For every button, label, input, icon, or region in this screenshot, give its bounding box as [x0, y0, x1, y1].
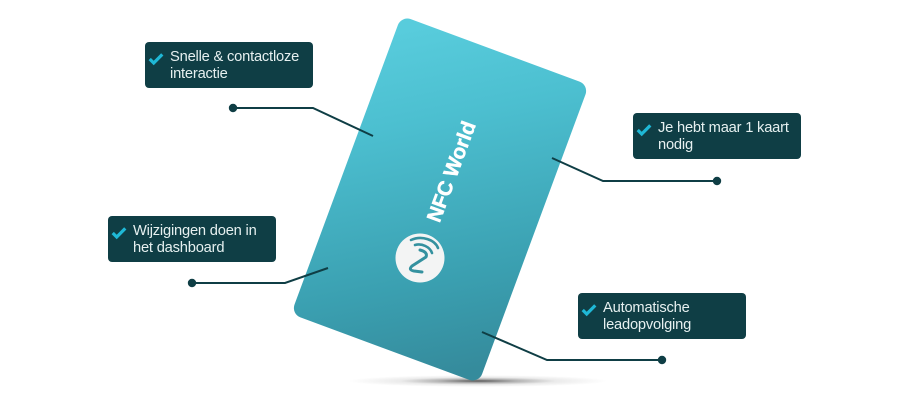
callout: lead tracking: Automatische — [603, 300, 690, 316]
callout: contactless — [145, 42, 313, 88]
logo badge — [396, 234, 444, 282]
callout: lead tracking: leadopvolging — [603, 316, 691, 332]
card title: NFC World — [423, 118, 481, 225]
callout: one card: Je hebt maar 1 kaart — [658, 120, 789, 136]
connector: lead tracking — [482, 332, 666, 364]
callout: one card — [633, 113, 801, 159]
NFC card — [291, 16, 589, 383]
callout: lead tracking — [578, 293, 746, 339]
connector: contactless — [229, 104, 373, 136]
callout: one card: nodig — [658, 136, 693, 152]
callout: contactless: Snelle & contactloze — [170, 49, 299, 65]
callout: dashboard: Wijzigingen doen in — [133, 223, 257, 239]
callout: dashboard: het dashboard — [133, 240, 224, 256]
card shadow — [348, 375, 608, 387]
connector: one card — [552, 158, 721, 185]
callout: dashboard — [108, 216, 276, 262]
connector: dashboard — [188, 268, 328, 287]
callout: contactless: interactie — [170, 66, 228, 82]
